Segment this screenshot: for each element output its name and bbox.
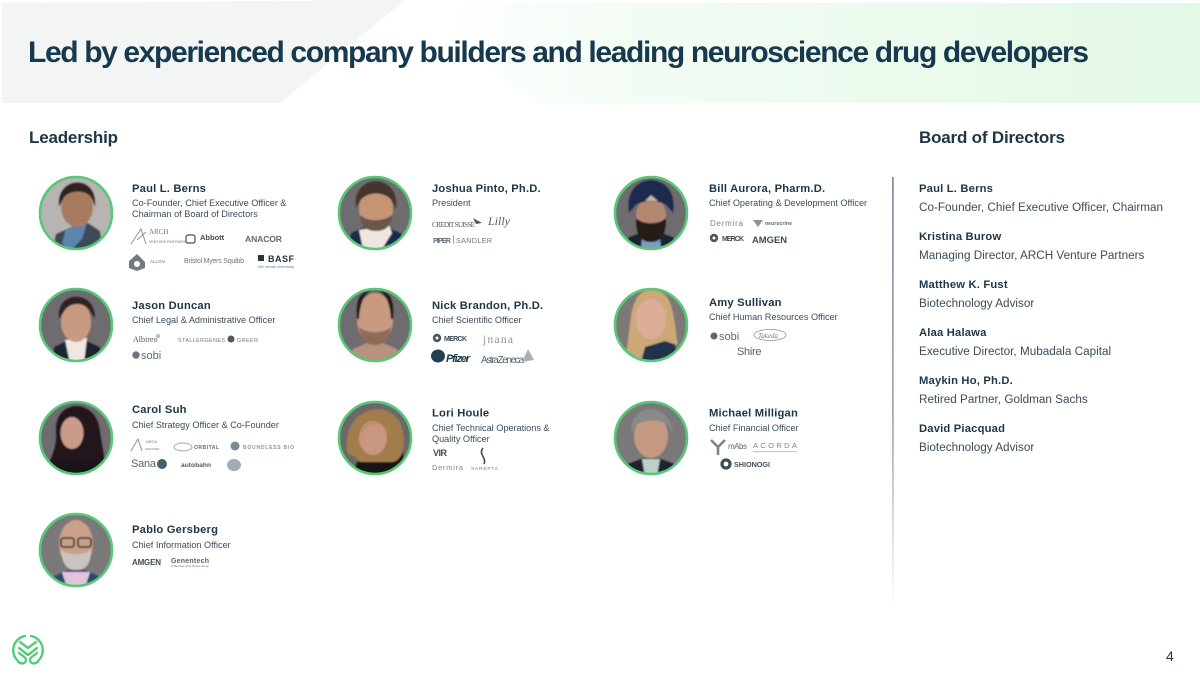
text: Lori Houle: Quality Officer — [432, 434, 490, 444]
logos: Pablo Gersberg: Genentech — [171, 558, 209, 565]
logos: Nick Brandon: Pfizer — [446, 353, 471, 365]
text: Lori Houle: Lori Houle — [432, 408, 489, 420]
text: Bill Aurora — [709, 183, 867, 208]
portrait: Bill Aurora — [614, 176, 688, 251]
director: Maykin Ho: Maykin Ho, Ph.D. — [919, 375, 1013, 387]
director: Maykin Ho — [919, 375, 1088, 406]
page number: 4 — [1166, 648, 1174, 664]
text: Paul L. Berns — [132, 183, 287, 219]
text: Lori Houle — [432, 408, 550, 444]
text: Joshua Pinto: President — [432, 198, 471, 208]
text: Nick Brandon: Nick Brandon, Ph.D. — [432, 300, 543, 312]
text: Michael Milligan — [709, 408, 799, 433]
portrait: Carol Suh — [39, 401, 113, 476]
logos: Paul L. Berns: Bristol Myers Squibb — [184, 258, 244, 265]
logos: Nick Brandon: MERCK — [444, 336, 467, 343]
portrait: Paul L. Berns — [39, 176, 113, 251]
logos: Paul L. Berns: BASF — [268, 254, 294, 264]
text: Michael Milligan: Chief Financial Officer — [709, 423, 799, 433]
director: Kristina Burow: Managing Director, ARCH Venture Partners — [919, 249, 1145, 262]
director: Kristina Burow: Kristina Burow — [919, 231, 1001, 243]
text: Pablo Gersberg — [132, 524, 231, 550]
text: Jason Duncan: Chief Legal & Administrative Officer — [132, 315, 275, 325]
text: Michael Milligan: Michael Milligan — [709, 408, 798, 420]
logos: Paul L. Berns — [129, 228, 294, 271]
header band — [2, 0, 1200, 103]
logos: Michael Milligan: mAbs — [728, 442, 747, 451]
portrait: Joshua Pinto — [338, 176, 412, 251]
text: Carol Suh: Carol Suh — [132, 404, 187, 416]
logos: Michael Milligan: ACORDA — [753, 441, 798, 450]
board list — [919, 183, 1163, 454]
portrait: Jason Duncan — [39, 288, 113, 363]
heading: Board of Directors: Board of Directors — [919, 128, 1065, 147]
logos: Carol Suh: Sana — [131, 458, 157, 470]
text: Paul L. Berns: Chairman of Board of Directors — [132, 209, 258, 219]
logos: Paul L. Berns: We create chemistry — [258, 264, 294, 269]
text: Amy Sullivan — [709, 297, 838, 322]
logos: Nick Brandon: jnana — [482, 334, 513, 346]
logos: Joshua Pinto: Lilly — [487, 214, 511, 228]
logos: Bill Aurora: neurocrine — [765, 221, 792, 227]
logos: Nick Brandon: AstraZeneca — [481, 355, 524, 366]
director: Paul L. Berns: Co-Founder, Chief Executive Officer, Chairman — [919, 201, 1163, 214]
logos: Lori Houle: VIR — [433, 448, 448, 458]
logos: Lori Houle: SAREPTA — [471, 466, 499, 472]
logos: Joshua Pinto: SANDLER — [456, 236, 492, 245]
director: Alaa Halawa: Executive Director, Mubadala Capital — [919, 345, 1111, 358]
logos: Pablo Gersberg: A Member of the Roche Group — [171, 564, 209, 568]
director: Maykin Ho: Retired Partner, Goldman Sachs — [919, 393, 1088, 406]
logos: Amy Sullivan — [710, 330, 786, 358]
divider — [892, 177, 894, 607]
logos: Lori Houle: Dermira — [432, 463, 464, 472]
director: Matthew K. Fust — [919, 279, 1034, 310]
director: Paul L. Berns — [919, 183, 1163, 214]
logos: Jason Duncan: STALLERGENES — [178, 338, 225, 344]
text: Pablo Gersberg: Chief Information Officer — [132, 540, 231, 550]
director: Matthew K. Fust: Biotechnology Advisor — [919, 297, 1034, 310]
logos: Bill Aurora: MERCK — [722, 236, 744, 243]
text: Jason Duncan: Jason Duncan — [132, 300, 211, 312]
director: David Piacquad: David Piacquad — [919, 423, 1005, 435]
logos: Jason Duncan — [132, 334, 258, 362]
text: Bill Aurora: Bill Aurora, Pharm.D. — [709, 183, 825, 195]
text: Pablo Gersberg: Pablo Gersberg — [132, 524, 218, 536]
icon: company logo — [13, 636, 43, 663]
text: Amy Sullivan: Chief Human Resources Officer — [709, 312, 838, 322]
portrait: Nick Brandon — [338, 288, 412, 363]
logos: Carol Suh: ORBITAL — [194, 445, 219, 451]
logos: Joshua Pinto: CREDIT SUISSE — [432, 221, 476, 229]
logos: Bill Aurora: AMGEN — [752, 234, 787, 245]
text: Bill Aurora: Chief Operating & Development Officer — [709, 198, 867, 208]
logos: Paul L. Berns: ANACOR — [245, 234, 283, 244]
text: Joshua Pinto — [432, 183, 541, 208]
logos: Joshua Pinto: PIPER — [433, 236, 452, 245]
heading: Leadership: Leadership — [29, 128, 118, 147]
text: Carol Suh — [132, 404, 279, 430]
director: Matthew K. Fust: Matthew K. Fust — [919, 279, 1008, 291]
logos: Paul L. Berns: Abbott — [200, 233, 225, 242]
logos: Amy Sullivan: sobi — [719, 331, 739, 343]
logos: Lori Houle — [432, 448, 499, 472]
logos: Joshua Pinto — [432, 214, 511, 245]
director: Alaa Halawa — [919, 327, 1111, 358]
logos: Pablo Gersberg: AMGEN — [132, 558, 161, 567]
logos: Bill Aurora: Dermira — [710, 219, 744, 228]
logos: Paul L. Berns: ALLON — [150, 259, 165, 264]
logos: Carol Suh: ARCH — [146, 439, 157, 444]
logos: Jason Duncan: GREER — [237, 338, 258, 344]
logos: Michael Milligan: SHIONOGI — [734, 460, 770, 469]
logos: Amy Sullivan: Takeda — [758, 332, 778, 340]
logos: Carol Suh: BOUNDLESS BIO — [243, 445, 294, 451]
director: David Piacquad: Biotechnology Advisor — [919, 441, 1034, 454]
text: Nick Brandon: Chief Scientific Officer — [432, 315, 522, 325]
portrait: Pablo Gersberg — [39, 513, 113, 588]
logos: Nick Brandon — [431, 334, 534, 366]
text: Jason Duncan — [132, 300, 275, 325]
logos: Amy Sullivan: Shire — [737, 346, 761, 358]
text: Nick Brandon — [432, 300, 543, 325]
director: David Piacquad — [919, 423, 1034, 454]
text: Paul L. Berns: Paul L. Berns — [132, 183, 206, 195]
logos: Carol Suh: VENTURE — [145, 447, 159, 451]
logos: Pablo Gersberg — [132, 558, 209, 568]
portrait: Amy Sullivan — [614, 288, 688, 363]
logos: Michael Milligan — [711, 440, 798, 470]
director: Paul L. Berns: Paul L. Berns — [919, 183, 993, 195]
text: Carol Suh: Chief Strategy Officer & Co-Founder — [132, 420, 279, 430]
text: Joshua Pinto: Joshua Pinto, Ph.D. — [432, 183, 541, 195]
portrait: Michael Milligan — [614, 401, 688, 476]
logos: Carol Suh: autobahn — [181, 462, 211, 469]
text: Amy Sullivan: Amy Sullivan — [709, 297, 782, 309]
logos: Jason Duncan: Albireo — [133, 335, 157, 344]
director: Kristina Burow — [919, 231, 1145, 262]
logos: Paul L. Berns: ARCH — [149, 228, 168, 236]
portrait: Lori Houle — [338, 401, 412, 476]
logos: Paul L. Berns: VENTURE PARTNERS — [149, 240, 187, 244]
logos: Carol Suh — [131, 439, 294, 471]
director: Alaa Halawa: Alaa Halawa — [919, 327, 987, 339]
text: Paul L. Berns: Co-Founder, Chief Executive Officer & — [132, 198, 287, 208]
text: Lori Houle: Chief Technical Operations & — [432, 423, 550, 433]
logos: Bill Aurora — [710, 219, 792, 245]
title: Led by experienced company builders and leading neuroscience drug developers — [28, 36, 1089, 69]
logos: Jason Duncan: sobi — [141, 350, 161, 362]
